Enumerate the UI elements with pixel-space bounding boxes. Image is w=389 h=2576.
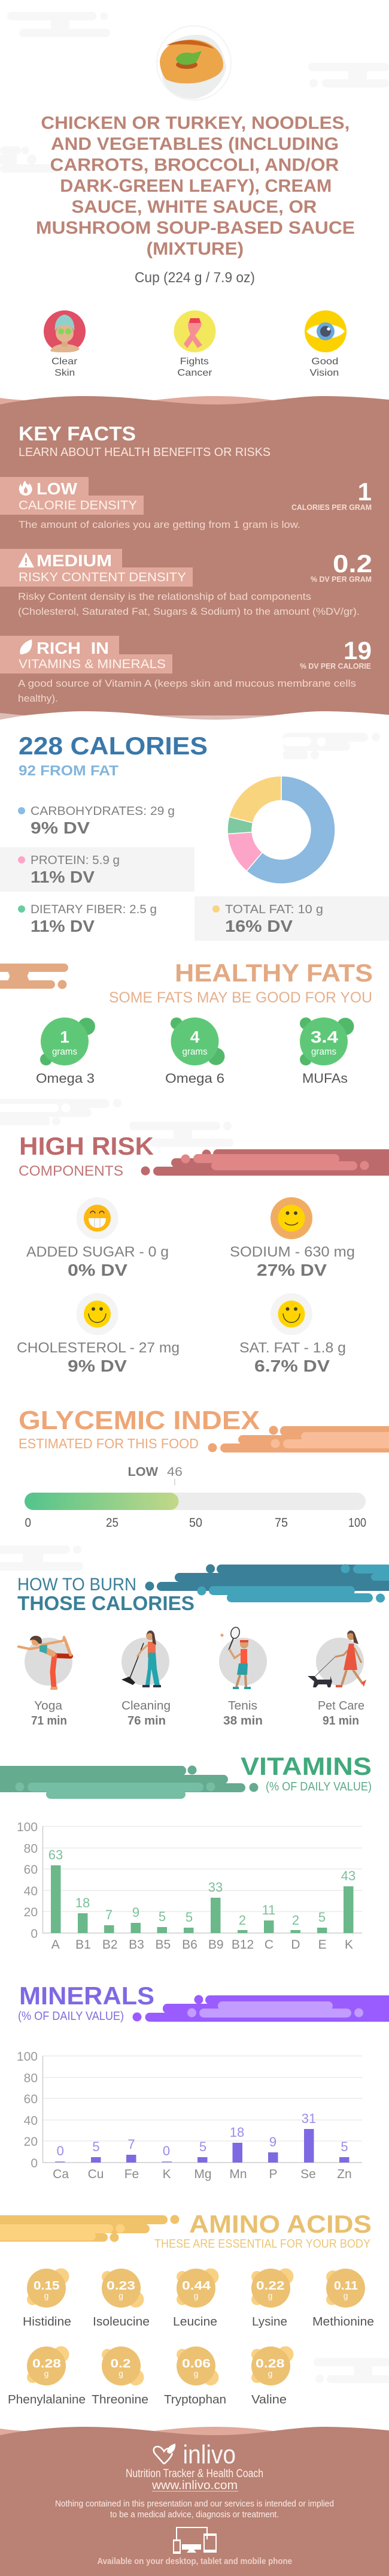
component: saturated fat — [239, 1293, 346, 1375]
icon: soup bowl — [157, 26, 231, 100]
bar chart: minerals: Se — [300, 2167, 316, 2181]
component: added sugar: 0% DV — [68, 1261, 127, 1279]
amino acid: valine: g — [268, 2369, 272, 2378]
activity: pet care — [308, 1630, 366, 1728]
subheading: healthy fats: SOME FATS MAY BE GOOD FOR YOU — [109, 989, 372, 1006]
glycemic index scale bar — [25, 1493, 366, 1530]
fact: rich in vitamins and minerals: A good source of Vitamin A (keeps skin and mucous membrane cells — [18, 678, 356, 689]
fact: low calorie density: LOW — [37, 479, 78, 498]
benefit: fights cancer: Cancer — [177, 368, 212, 378]
bar chart: minerals: 0 — [163, 2143, 170, 2158]
decorative bars: healthy fats — [0, 964, 68, 989]
amino acid: methionine — [312, 2269, 374, 2329]
heading: 228 calories: 228 CALORIES — [19, 732, 208, 760]
panel: glycemic index — [19, 1406, 389, 1530]
glycemic index scale bar: 50 — [189, 1516, 202, 1530]
bar chart: vitamins: B1 — [75, 1938, 91, 1952]
row: protein: PROTEIN: 5.9 g — [31, 854, 120, 867]
title: (MIXTURE) — [147, 239, 244, 259]
donut chart — [227, 776, 335, 884]
fact: rich in vitamins and minerals: RICH IN — [37, 639, 109, 657]
bar chart: vitamins: B3 — [129, 1938, 144, 1952]
bar chart: minerals: Mg — [194, 2167, 212, 2181]
amino acid: valine: 0.28 — [256, 2357, 285, 2370]
disclaimer: Nothing contained in this presentation and our services is intended or implied — [55, 2499, 334, 2509]
fact: medium risky content density — [0, 549, 372, 617]
amino acid: histidine: g — [44, 2291, 48, 2300]
bar chart: vitamins: 5 — [186, 1910, 193, 1925]
bar chart: vitamins: B9 — [208, 1938, 224, 1952]
row: carbohydrates: CARBOHYDRATES: 29 g — [31, 805, 175, 818]
glycemic index scale bar: 25 — [106, 1516, 118, 1530]
amino acid: isoleucine: Isoleucine — [93, 2315, 150, 2329]
heading: amino acids: AMINO ACIDS — [189, 2210, 372, 2238]
heading: those calories: THOSE CALORIES — [17, 1592, 194, 1614]
fact: medium risky content density: RISKY CONTENT DENSITY — [19, 570, 186, 584]
stat: omega 6 — [165, 1017, 225, 1086]
bar chart: minerals: 18 — [230, 2125, 244, 2140]
fact: rich in vitamins and minerals: 19 — [344, 636, 372, 665]
bar chart: minerals: 5 — [341, 2139, 348, 2154]
bar chart: vitamins: B5 — [156, 1938, 171, 1952]
bar chart: minerals: 5 — [199, 2139, 206, 2154]
heading: healthy fats: HEALTHY FATS — [175, 959, 373, 987]
bar chart: vitamins: 18 — [75, 1895, 90, 1910]
stat: mufas: 3.4 — [311, 1028, 338, 1046]
fact: medium risky content density: 0.2 — [333, 549, 372, 578]
panel: footer — [0, 2427, 389, 2576]
amino acid: threonine: g — [118, 2369, 123, 2378]
bar chart: minerals: Mn — [229, 2167, 247, 2181]
row: protein — [0, 847, 194, 892]
panel: minerals — [17, 1982, 389, 2181]
stat: mufas: MUFAs — [302, 1071, 348, 1086]
title: CHICKEN OR TURKEY, NOODLES, — [41, 113, 350, 133]
bar chart: vitamins: D — [291, 1938, 300, 1952]
component: sodium: 27% DV — [257, 1261, 327, 1279]
component: saturated fat: SAT. FAT - 1.8 g — [239, 1340, 346, 1356]
bar chart: vitamins: 63 — [48, 1847, 63, 1862]
title — [36, 113, 355, 259]
amino acid: histidine: 0.15 — [34, 2279, 60, 2293]
bar chart: vitamins: 43 — [341, 1868, 355, 1883]
amino acid: lysine: g — [268, 2291, 272, 2300]
amino acid: lysine: 0.22 — [256, 2279, 285, 2293]
row: dietary fiber: 11% DV — [31, 917, 95, 935]
activity: tennis: 38 min — [223, 1714, 263, 1728]
decorative bars: minerals — [133, 1995, 389, 2022]
glycemic index scale bar: 0 — [25, 1516, 31, 1530]
bar chart: minerals: Ca — [53, 2167, 69, 2181]
icon: devices — [173, 2527, 217, 2554]
amino acid: isoleucine: g — [118, 2291, 123, 2300]
glycemic index scale bar: 100 — [348, 1516, 366, 1530]
fact: low calorie density: 1 — [358, 478, 372, 506]
amino acid: valine: Valine — [251, 2393, 287, 2406]
subheading: components: COMPONENTS — [19, 1163, 123, 1179]
glycemic index scale bar: 75 — [275, 1516, 288, 1530]
amino acid: valine — [251, 2347, 293, 2406]
row: protein: 11% DV — [31, 868, 95, 886]
bar chart: minerals: K — [163, 2167, 171, 2181]
bar chart: minerals: Cu — [88, 2167, 104, 2181]
row: dietary fiber — [18, 903, 157, 935]
subheading: essential for your body: THESE ARE ESSENTIAL FOR YOUR BODY — [154, 2237, 370, 2251]
amino acid: lysine: Lysine — [252, 2315, 287, 2329]
fact: rich in vitamins and minerals — [0, 636, 372, 704]
bar chart: minerals: Fe — [124, 2167, 139, 2181]
benefit: clear skin: Skin — [54, 368, 75, 378]
bar chart: minerals: P — [269, 2167, 278, 2181]
stat: omega 6: Omega 6 — [165, 1071, 224, 1086]
disclaimer: to be a medical advice, diagnosis or treatment. — [110, 2509, 279, 2520]
row: total fat: 16% DV — [225, 917, 293, 935]
fact: low calorie density: The amount of calories you are getting from 1 gram is low. — [19, 519, 300, 530]
fact: medium risky content density: (Cholesterol, Saturated Fat, Sugars & Sodium) to the amount (%DV/gr). — [18, 606, 360, 617]
fact: low calorie density — [0, 477, 372, 530]
bar chart: vitamins: B6 — [182, 1938, 197, 1952]
bar chart: vitamins: 100 — [17, 1820, 38, 1834]
panel: key facts — [0, 396, 389, 720]
amino acid: tryptophan: g — [194, 2369, 198, 2378]
bar chart: vitamins: B2 — [102, 1938, 118, 1952]
decorative bars: vitamins — [0, 1765, 259, 1799]
bar chart: vitamins — [17, 1820, 362, 1952]
amino acid: histidine — [23, 2269, 71, 2329]
background clouds: top of page — [0, 12, 389, 173]
glycemic value label: 46 — [167, 1465, 183, 1479]
bar chart: vitamins: A — [51, 1938, 60, 1952]
decorative bars: high risk — [141, 1149, 389, 1176]
panel: how to burn those calories — [17, 1564, 389, 1728]
benefit: fights cancer: Fights — [180, 357, 209, 367]
activity: yoga: 71 min — [31, 1714, 67, 1728]
bar chart: minerals: 80 — [24, 2071, 38, 2085]
activity: tennis: Tenis — [228, 1699, 257, 1713]
bar chart: minerals: 0 — [31, 2157, 38, 2170]
bar chart: vitamins: 2 — [292, 1913, 299, 1928]
amino acid: phenylalanine — [8, 2347, 86, 2406]
background cloud: burn — [0, 1545, 83, 1571]
panel: high risk components — [17, 1132, 389, 1375]
heading: key facts: KEY FACTS — [19, 422, 136, 445]
background cloud: calories — [283, 733, 380, 759]
availability note: Available on your desktop, tablet and mobile phone — [97, 2556, 292, 2566]
website link: www.inlivo.com — [151, 2479, 238, 2492]
bar chart: minerals: 7 — [127, 2137, 135, 2152]
bar chart: vitamins: E — [318, 1938, 327, 1952]
row: dietary fiber: DIETARY FIBER: 2.5 g — [31, 903, 157, 916]
row: carbohydrates — [18, 805, 175, 837]
amino acid: methionine: 0.11 — [334, 2279, 358, 2293]
amino acid: lysine — [251, 2269, 293, 2329]
bar chart: vitamins: 0 — [31, 1927, 38, 1941]
amino acid: threonine: Threonine — [92, 2393, 148, 2406]
benefit: good vision: Vision — [309, 368, 339, 378]
tagline: Nutrition Tracker & Health Coach — [126, 2468, 263, 2480]
stat: omega 3: Omega 3 — [36, 1071, 95, 1086]
component: cholesterol — [17, 1293, 180, 1375]
disclaimer — [55, 2499, 334, 2520]
amino acid: methionine: Methionine — [312, 2315, 374, 2329]
bar chart: vitamins: 7 — [105, 1907, 113, 1922]
bar chart: vitamins: B12 — [232, 1938, 254, 1952]
component: added sugar: ADDED SUGAR - 0 g — [26, 1244, 169, 1260]
activity: yoga — [19, 1636, 72, 1728]
amino acid: phenylalanine: Phenylalanine — [8, 2393, 86, 2406]
bar chart: minerals: 60 — [24, 2092, 38, 2106]
bar chart: minerals: Zn — [337, 2167, 352, 2181]
component: saturated fat: 6.7% DV — [254, 1357, 330, 1375]
bar chart: vitamins: 5 — [159, 1909, 166, 1924]
activity: cleaning: Cleaning — [121, 1699, 171, 1713]
activity: cleaning: 76 min — [127, 1714, 166, 1728]
bar chart: minerals: 20 — [24, 2135, 38, 2149]
bar chart: vitamins: 80 — [24, 1842, 38, 1856]
bar chart: vitamins: 60 — [24, 1863, 38, 1877]
glycemic value label: LOW — [128, 1465, 158, 1479]
stat: omega 3: 1 — [60, 1028, 69, 1046]
bar chart: vitamins: 33 — [208, 1880, 223, 1895]
bar chart: vitamins: 20 — [24, 1905, 38, 1919]
bar chart: vitamins: K — [345, 1938, 353, 1952]
decorative bars: burn — [145, 1564, 389, 1602]
decorative bars: glycemic — [208, 1426, 389, 1452]
glycemic value label — [128, 1465, 183, 1485]
title: DARK-GREEN LEAFY), CREAM — [60, 176, 332, 196]
benefit: fights cancer — [174, 310, 215, 378]
stat: mufas — [300, 1017, 354, 1086]
stat: omega 6: 4 — [190, 1028, 200, 1046]
fact: low calorie density: CALORIES PER GRAM — [291, 503, 372, 512]
bar chart: vitamins: 5 — [318, 1910, 326, 1925]
bar chart: minerals: 9 — [269, 2134, 276, 2149]
title: SAUCE, WHITE SAUCE, OR — [71, 197, 317, 217]
amino acid: leucine: 0.44 — [182, 2279, 211, 2293]
activity: pet care: Pet Care — [318, 1699, 364, 1713]
component: cholesterol: 9% DV — [68, 1357, 127, 1375]
row: carbohydrates: 9% DV — [31, 819, 90, 837]
icon: inlivo logo — [154, 2444, 175, 2464]
benefit: good vision: Good — [311, 357, 338, 367]
bar chart: minerals: 100 — [17, 2050, 38, 2064]
panel: healthy fats — [0, 959, 373, 1086]
heading: minerals: MINERALS — [19, 1982, 154, 2010]
title: MUSHROOM SOUP-BASED SAUCE — [36, 218, 355, 238]
fact: rich in vitamins and minerals: % DV PER CALORIE — [300, 662, 371, 671]
bar chart: vitamins: 11 — [262, 1902, 275, 1917]
decorative bars: amino acids — [0, 2215, 180, 2242]
activity: yoga: Yoga — [34, 1699, 63, 1713]
serving size: Cup (224 g / 7.9 oz) — [135, 270, 255, 286]
heading: high risk: HIGH RISK — [19, 1132, 154, 1160]
benefit: good vision — [305, 310, 347, 378]
title: AND VEGETABLES (INCLUDING — [51, 134, 339, 154]
heading: how to burn: HOW TO BURN — [17, 1575, 136, 1594]
subheading: key facts: LEARN ABOUT HEALTH BENEFITS OR RISKS — [19, 446, 271, 459]
benefit: clear skin: Clear — [51, 357, 78, 367]
amino acid: isoleucine: 0.23 — [107, 2279, 135, 2293]
amino acid: tryptophan: 0.06 — [182, 2357, 211, 2370]
bar chart: minerals — [17, 2050, 362, 2181]
bar chart: vitamins: 2 — [239, 1913, 246, 1928]
amino acid: leucine: Leucine — [173, 2315, 217, 2329]
fact: medium risky content density: Risky Content density is the relationship of bad components — [18, 591, 311, 602]
heading: vitamins: VITAMINS — [241, 1752, 372, 1780]
heading: glycemic index: GLYCEMIC INDEX — [19, 1406, 260, 1435]
title: CARROTS, BROCCOLI, AND/OR — [50, 155, 339, 175]
bar chart: minerals: 31 — [302, 2111, 316, 2126]
activity: pet care: 91 min — [323, 1714, 359, 1728]
amino acid: threonine: 0.2 — [110, 2357, 130, 2370]
bar chart: minerals: 40 — [24, 2114, 38, 2128]
amino acid: tryptophan — [164, 2347, 226, 2406]
stat: omega 6: grams — [182, 1047, 207, 1057]
benefit: clear skin — [44, 310, 86, 378]
bar chart: minerals: 0 — [57, 2143, 64, 2158]
amino acid: methionine: g — [344, 2291, 348, 2300]
fact: medium risky content density: MEDIUM — [37, 551, 112, 570]
activity: tennis — [219, 1626, 267, 1728]
panel: amino acids — [0, 2210, 374, 2406]
amino acid: leucine: g — [194, 2291, 198, 2300]
fact: rich in vitamins and minerals: healthy). — [18, 693, 58, 704]
fact: medium risky content density: % DV PER GRAM — [311, 575, 372, 584]
fact: low calorie density: CALORIE DENSITY — [19, 499, 137, 512]
amino acid: threonine — [92, 2347, 148, 2406]
activity: cleaning — [121, 1630, 171, 1728]
background clouds: high risk — [0, 1099, 233, 1147]
bar chart: vitamins: 9 — [132, 1905, 139, 1920]
amino acid: tryptophan: Tryptophan — [164, 2393, 226, 2406]
row: total fat — [194, 896, 389, 941]
panel: calories — [0, 732, 389, 941]
amino acid: phenylalanine: 0.28 — [32, 2357, 61, 2370]
amino acid: histidine: Histidine — [23, 2315, 71, 2329]
subheading: 92 from fat: 92 FROM FAT — [19, 763, 118, 779]
amino acid: isoleucine — [93, 2269, 150, 2329]
bar chart: vitamins: C — [265, 1938, 273, 1952]
component: cholesterol: CHOLESTEROL - 27 mg — [17, 1340, 180, 1356]
row: total fat: TOTAL FAT: 10 g — [225, 903, 323, 916]
bar chart: vitamins: 40 — [24, 1885, 38, 1898]
fact: rich in vitamins and minerals: VITAMINS & MINERALS — [19, 657, 166, 671]
stat: omega 3 — [36, 1017, 95, 1086]
background cloud: amino acids — [314, 2358, 389, 2383]
stat: omega 3: grams — [52, 1047, 77, 1057]
stat: mufas: grams — [311, 1047, 336, 1057]
component: sodium — [230, 1197, 355, 1279]
component: added sugar — [26, 1197, 169, 1279]
logo wordmark: inlivo — [183, 2440, 236, 2469]
amino acid: leucine — [173, 2269, 219, 2329]
subheading: percent of daily value: (% OF DAILY VALUE) — [18, 2010, 124, 2023]
component: sodium: SODIUM - 630 mg — [230, 1244, 355, 1260]
bar chart: minerals: 5 — [92, 2139, 100, 2154]
panel: vitamins — [0, 1752, 372, 1952]
subheading: estimated for this food: ESTIMATED FOR THIS FOOD — [19, 1436, 199, 1451]
subheading: percent of daily value: (% OF DAILY VALUE) — [266, 1780, 372, 1793]
amino acid: phenylalanine: g — [44, 2369, 48, 2378]
